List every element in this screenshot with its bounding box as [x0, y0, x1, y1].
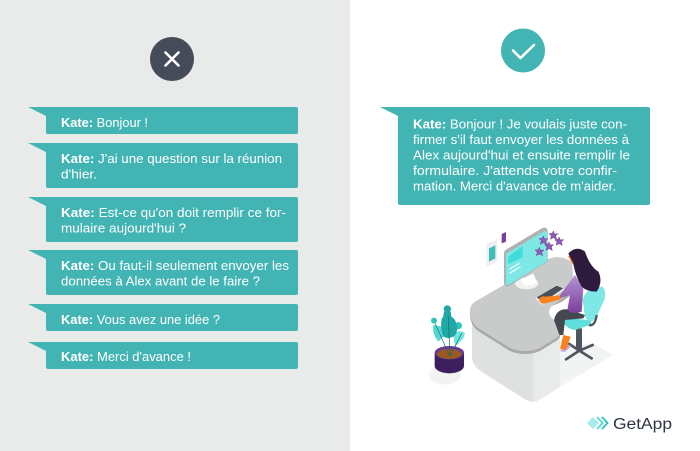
logo mark — [587, 417, 608, 429]
bubble: good single message: Alex aujourd'hui et ensuite remplir le — [413, 148, 630, 162]
bubble: remplir ce formulaire — [28, 197, 298, 242]
bubble: good single message: firmer s'il faut envoyer les données à — [413, 132, 630, 147]
bubble: question sur la réunion: Kate: J'ai une question sur la réunion — [61, 151, 282, 166]
logo: GetApp: GetApp — [613, 416, 672, 433]
panel: good example background — [350, 0, 700, 451]
woman — [539, 249, 600, 352]
chair — [562, 287, 605, 359]
logo: GetApp — [587, 416, 672, 433]
bubble: Vous avez une idée: Kate: Vous avez une idée ? — [61, 312, 220, 327]
bubble: Bonjour: Kate: Bonjour ! — [61, 115, 148, 130]
bubble: Merci d'avance: Kate: Merci d'avance ! — [61, 349, 191, 364]
icon: check in teal circle — [501, 28, 545, 72]
bubble: question sur la réunion: d'hier. — [61, 166, 97, 182]
bubble: Bonjour — [28, 107, 298, 134]
illustration: woman at desk — [429, 228, 613, 402]
bubble: Vous avez une idée — [28, 304, 298, 331]
bubble: remplir ce formulaire: Kate: Est-ce qu'on doit remplir ce for- — [61, 205, 286, 220]
details in 3x coordinates — [487, 228, 605, 359]
bubble: Merci d'avance — [28, 342, 298, 369]
floating cards — [487, 232, 506, 267]
desk — [470, 257, 574, 402]
monitor — [504, 228, 548, 289]
bubble: good single message — [380, 107, 650, 205]
bubble: good single message: mation. Merci d'avance de m'aider. — [413, 178, 616, 194]
panel: bad example background — [0, 0, 350, 451]
bubble: envoyer les données — [28, 250, 298, 295]
bubble: question sur la réunion — [28, 143, 298, 188]
bubble: envoyer les données: Kate: Ou faut-il seulement envoyer les — [61, 258, 290, 273]
potted plant — [431, 305, 465, 373]
bubble: good single message: Kate: Bonjour ! Je voulais juste con- — [413, 116, 627, 132]
bubble: remplir ce formulaire: mulaire aujourd'hui ? — [61, 220, 186, 236]
icon: cross in dark circle — [150, 37, 194, 81]
bubble: envoyer les données: données à Alex avant de le faire ? — [61, 274, 260, 288]
stars — [535, 231, 564, 256]
keyboard — [535, 285, 565, 305]
floor shadow — [540, 343, 613, 387]
bubble: good single message: formulaire. J'attends votre confir- — [413, 163, 617, 178]
